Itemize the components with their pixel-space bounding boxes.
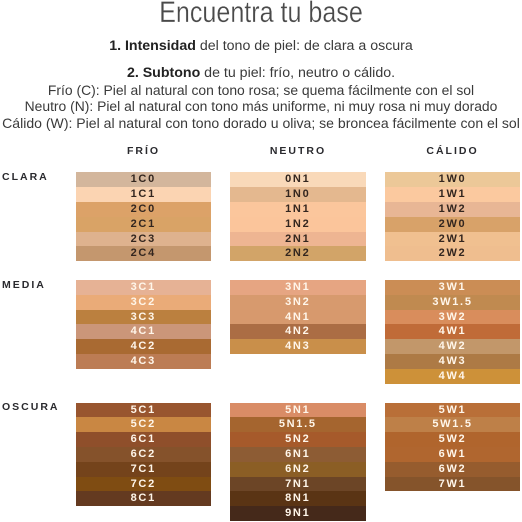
- swatches: clara cálido: [385, 172, 520, 261]
- text block: step 2 subtone: Cálido (W): Piel al natural con tono dorado u oliva; se broncea fácilmente con el sol: [2, 115, 520, 131]
- swatches: oscura frío: 7C1: [131, 463, 156, 475]
- swatches: clara neutro: 1N1: [285, 203, 310, 215]
- text block: step 1 intensity: 1. Intensidad del tono de piel: de clara a oscura: [109, 38, 413, 54]
- swatches: clara neutro: 1N0: [285, 188, 310, 200]
- swatches: oscura neutro: 8N1: [285, 492, 310, 504]
- swatches: media neutro: 4N3: [285, 340, 310, 352]
- row heading: clara: CLARA: [2, 171, 49, 183]
- swatches: clara frío: 2C4: [131, 247, 156, 259]
- swatches: clara neutro: 1N2: [285, 218, 310, 230]
- swatches: media neutro: [230, 280, 366, 354]
- swatches: oscura cálido: [385, 403, 520, 491]
- swatches: media frío: [76, 280, 211, 369]
- swatches: media cálido: 4W4: [439, 370, 466, 382]
- swatches: media neutro: 4N1: [285, 311, 310, 323]
- swatches: oscura neutro: [230, 403, 366, 521]
- swatches: oscura cálido: 5W1: [439, 404, 466, 416]
- swatches: clara neutro: 2N2: [285, 247, 310, 259]
- swatches: media neutro: 4N2: [285, 325, 310, 337]
- swatches: oscura neutro: 5N1: [285, 404, 310, 416]
- swatches: clara cálido: 2W2: [439, 247, 466, 259]
- column heading: cálido: CÁLIDO: [426, 144, 479, 156]
- swatches: clara cálido: 1W0: [439, 173, 466, 185]
- text block: step 2 subtone: 2. Subtono de tu piel: frío, neutro o cálido.: [127, 65, 395, 81]
- swatches: oscura neutro: 6N1: [285, 448, 310, 460]
- swatches: oscura neutro: 7N1: [285, 478, 310, 490]
- swatches: clara frío: 1C1: [131, 188, 156, 200]
- swatches: oscura neutro: 5N2: [285, 433, 310, 445]
- swatches: clara cálido: 2W1: [439, 233, 466, 245]
- column heading: frío: FRÍO: [127, 144, 160, 156]
- row heading: oscura: OSCURA: [2, 401, 60, 413]
- swatches: clara cálido: 1W1: [439, 188, 466, 200]
- swatches: clara frío: 1C0: [131, 173, 156, 185]
- swatches: clara cálido: 2W0: [439, 218, 466, 230]
- swatches: clara frío: [76, 172, 211, 261]
- swatches: media frío: 4C2: [131, 340, 156, 352]
- swatches: media frío: 3C3: [131, 311, 156, 323]
- swatches: media cálido: 4W1: [439, 325, 466, 337]
- swatches: oscura frío: 7C2: [131, 478, 156, 490]
- swatches: oscura frío: [76, 403, 211, 506]
- swatches: media neutro: 3N1: [285, 281, 310, 293]
- swatches: media cálido: 3W1.5: [432, 296, 473, 308]
- swatches: oscura cálido: 5W1.5: [432, 418, 473, 430]
- swatches: oscura neutro: 9N1: [285, 507, 310, 519]
- swatches: oscura neutro: 6N2: [285, 463, 310, 475]
- swatches: oscura frío: 6C1: [131, 433, 156, 445]
- swatches: media cálido: 4W2: [439, 340, 466, 352]
- swatches: oscura frío: 6C2: [131, 448, 156, 460]
- swatches: oscura cálido: 5W2: [439, 433, 466, 445]
- swatches: clara cálido: 1W2: [439, 203, 466, 215]
- text block: step 2 subtone: [2, 65, 520, 131]
- swatches: oscura frío: 8C1: [131, 492, 156, 504]
- text block: step 2 subtone: Frío (C): Piel al natural con tono rosa; se quema fácilmente con el sol: [48, 82, 474, 98]
- swatches: clara frío: 2C3: [131, 233, 156, 245]
- swatches: oscura cálido: 7W1: [439, 478, 466, 490]
- swatches: oscura cálido: 6W2: [439, 463, 466, 475]
- swatches: oscura cálido: 6W1: [439, 448, 466, 460]
- swatches: media cálido: 4W3: [439, 355, 466, 367]
- swatches: clara neutro: [230, 172, 366, 261]
- swatches: clara neutro: 0N1: [285, 173, 310, 185]
- swatches: clara frío: 2C1: [131, 218, 156, 230]
- swatches: oscura neutro: 5N1.5: [279, 418, 317, 430]
- swatches: oscura frío: 5C1: [131, 404, 156, 416]
- swatches: media neutro: 3N2: [285, 296, 310, 308]
- swatches: clara frío: 2C0: [131, 203, 156, 215]
- text block: step 2 subtone: Neutro (N): Piel al natural con tono más uniforme, ni muy rosa ni muy dorado: [25, 98, 497, 114]
- swatches: media cálido: 3W2: [439, 311, 466, 323]
- swatches: media cálido: 3W1: [439, 281, 466, 293]
- row heading: media: MEDIA: [2, 278, 46, 290]
- swatches: media frío: 3C1: [131, 281, 156, 293]
- swatches: media cálido: [385, 280, 520, 384]
- swatches: media frío: 4C1: [131, 325, 156, 337]
- swatches: media frío: 3C2: [131, 296, 156, 308]
- swatches: oscura frío: 5C2: [131, 418, 156, 430]
- swatches: media frío: 4C3: [131, 355, 156, 367]
- swatches: clara neutro: 2N1: [285, 233, 310, 245]
- column heading: neutro: NEUTRO: [270, 144, 326, 156]
